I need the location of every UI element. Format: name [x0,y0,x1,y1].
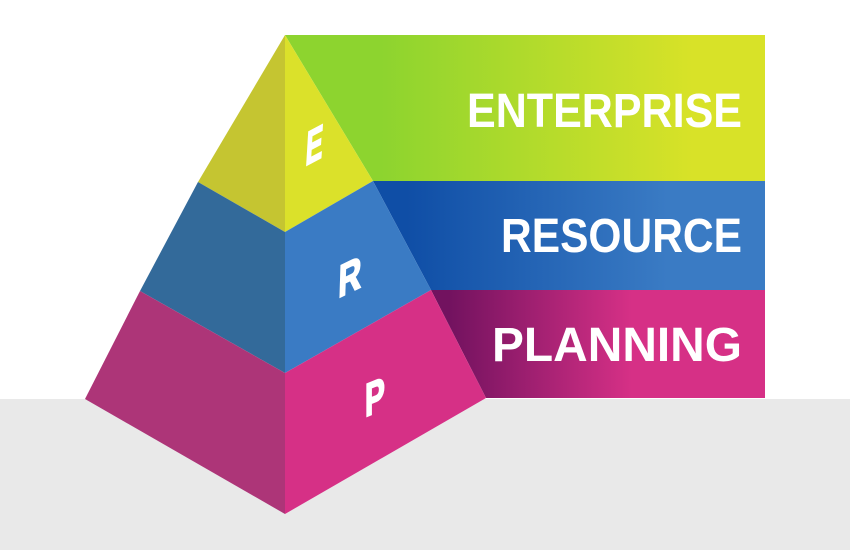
letter P: P [365,368,385,427]
background floor band [0,399,850,550]
panel: planning band [431,290,765,398]
pyramid middle tier: R [140,181,431,373]
pyramid top tier: E [198,35,373,232]
heading: planning: PLANNING [492,319,742,372]
heading: enterprise: ENTERPRISE [467,85,742,138]
pyramid bottom tier: P [85,290,486,514]
letter R: R [338,246,362,308]
panel: enterprise band [285,35,765,181]
heading: resource: RESOURCE [501,210,742,263]
panel: resource band [373,181,765,290]
pyramid [85,35,486,514]
letter E: E [304,115,325,177]
